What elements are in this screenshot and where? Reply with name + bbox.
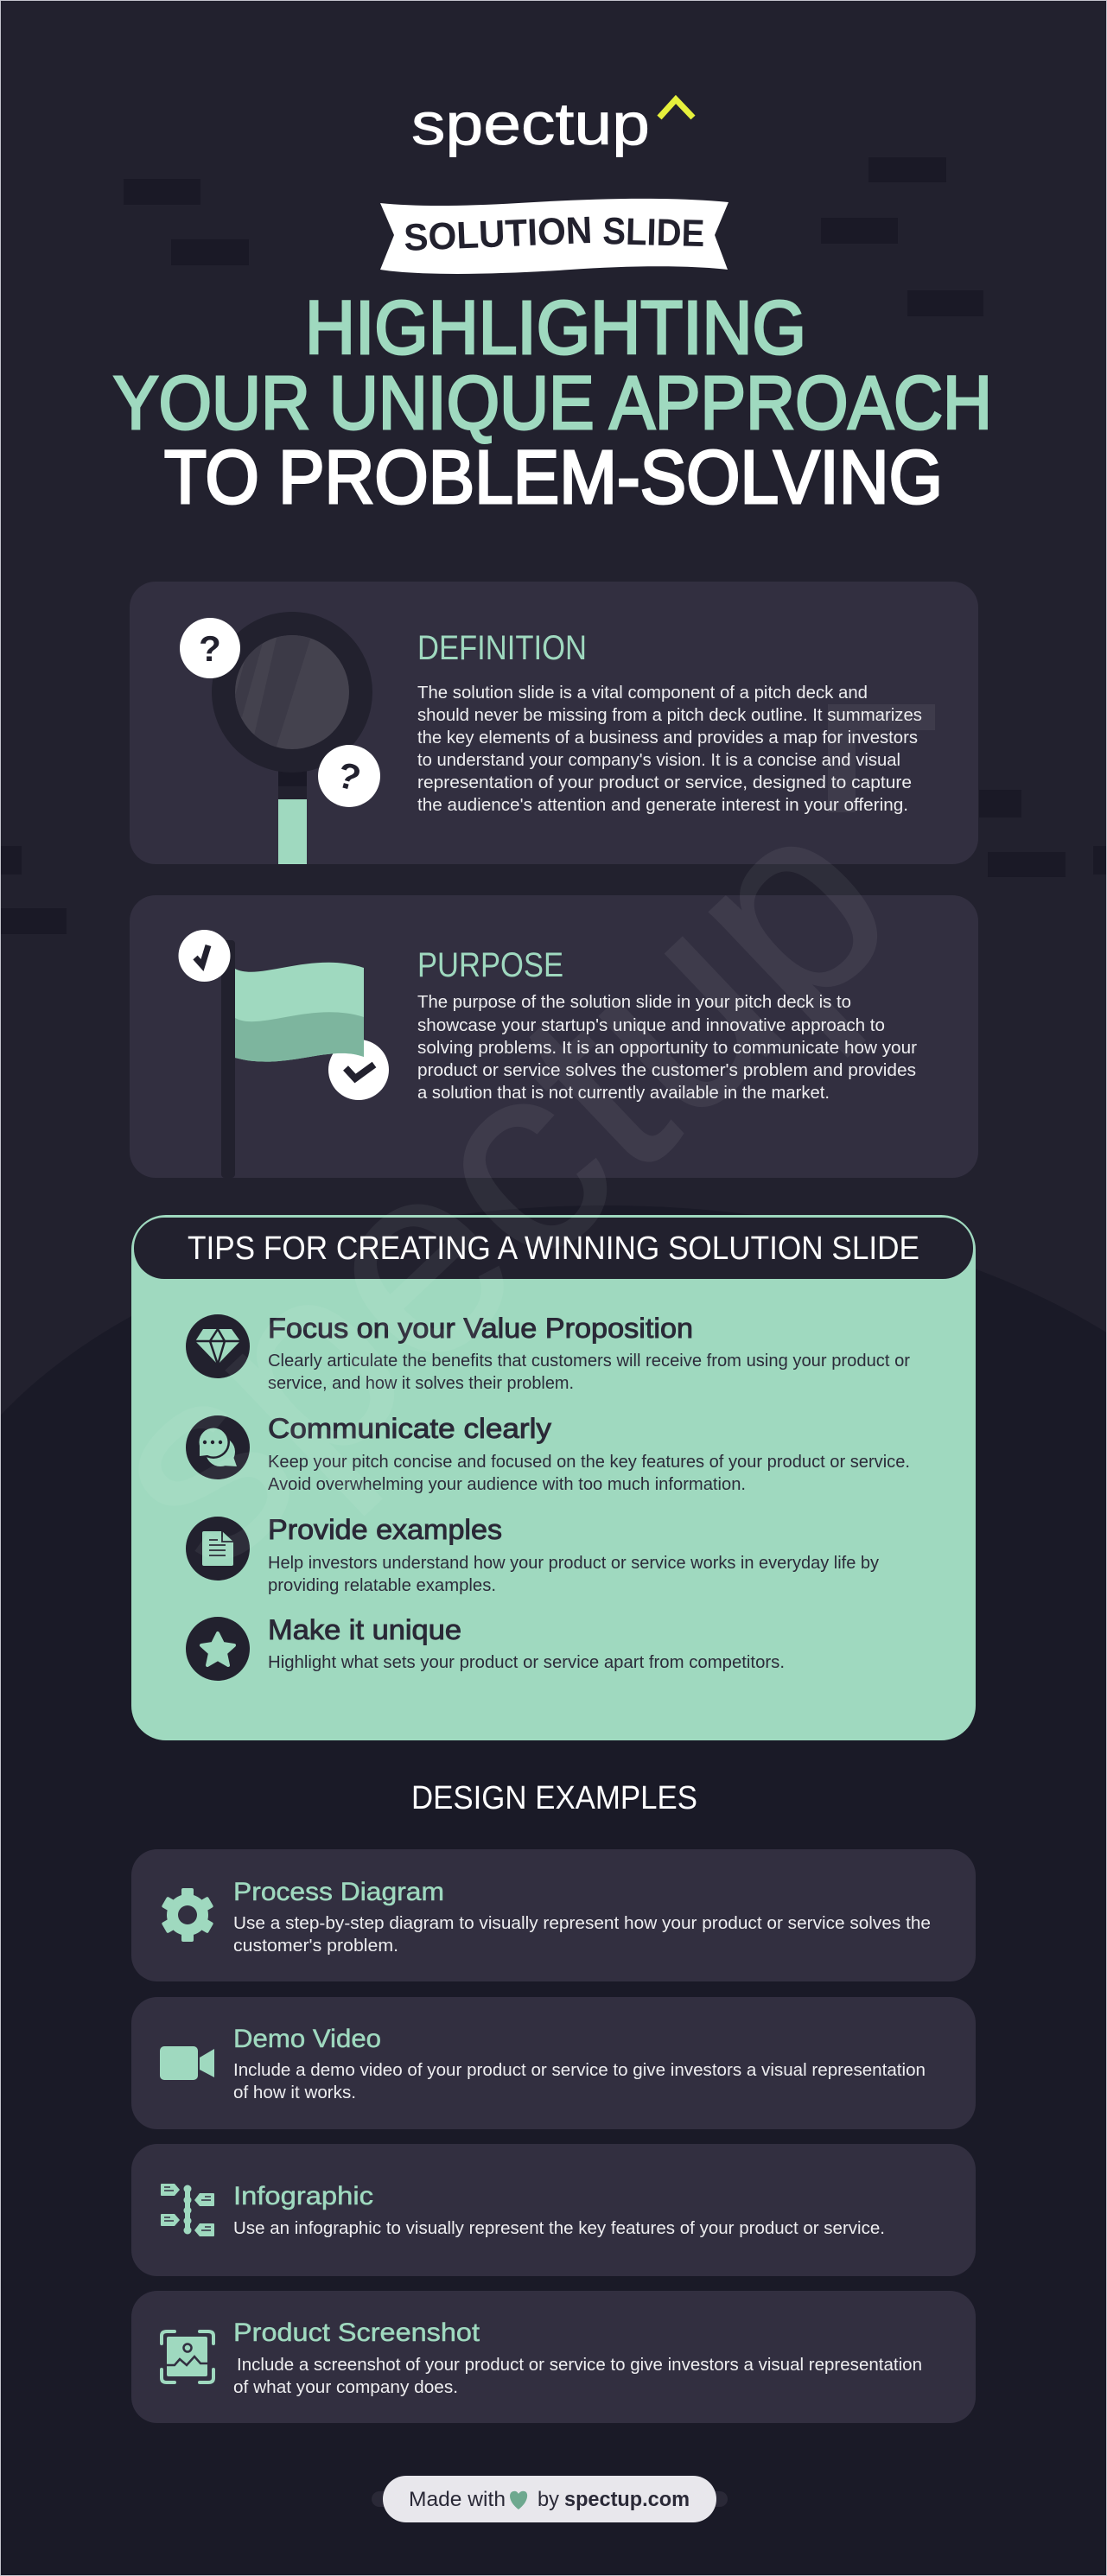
banner: solution slide: SLIDE xyxy=(602,210,705,255)
card: product screenshot xyxy=(131,2291,976,2423)
purpose text: a solution that is not currently available in the market. xyxy=(417,1083,830,1103)
heading: purpose: PURPOSE xyxy=(417,946,563,984)
definition text: should never be missing from a pitch deck outline. It summarizes xyxy=(417,705,922,725)
tip: value proposition: Clearly articulate the benefits that customers will receive from using your product or xyxy=(268,1352,910,1371)
footer badge: spectup.com xyxy=(564,2488,690,2511)
tips heading band: TIPS FOR CREATING A WINNING SOLUTION SLIDE xyxy=(188,1231,919,1267)
card: process diagram xyxy=(131,1849,976,1981)
tip: value proposition: Focus on your Value Proposition xyxy=(268,1313,693,1344)
tip: communicate clearly xyxy=(186,1413,910,1494)
card: process diagram: Use a step-by-step diagram to visually represent how your product or service solves the xyxy=(233,1913,931,1933)
purpose text: product or service solves the customer's problem and provides xyxy=(417,1060,916,1080)
panel: tips xyxy=(131,1215,976,1740)
definition text: the key elements of a business and provides a map for investors xyxy=(417,728,918,747)
card: demo video: Demo Video xyxy=(233,2025,381,2053)
tip: value proposition xyxy=(186,1313,910,1393)
tip: provide examples: Help investors understand how your product or service works in everyday life by xyxy=(268,1554,879,1573)
card: demo video: Include a demo video of your product or service to give investors a visual representation xyxy=(233,2060,926,2080)
definition text xyxy=(417,683,922,815)
purpose text: showcase your startup's unique and innovative approach to xyxy=(417,1015,885,1035)
purpose text: The purpose of the solution slide in your pitch deck is to xyxy=(417,992,851,1012)
tip: communicate clearly: Keep your pitch concise and focused on the key features of your product or service. xyxy=(268,1453,910,1472)
card: product screenshot: Include a screenshot of your product or service to give investors a visual representation xyxy=(237,2355,922,2375)
icon: magnifying glass with question marks xyxy=(180,612,380,864)
icon: flag with check marks xyxy=(178,930,389,1178)
footer badge xyxy=(372,2476,728,2522)
heading: design examples: DESIGN EXAMPLES xyxy=(411,1780,697,1816)
card: process diagram: Process Diagram xyxy=(233,1878,444,1906)
tip: provide examples xyxy=(186,1514,879,1595)
card: infographic: Use an infographic to visually represent the key features of your product or service. xyxy=(233,2218,885,2238)
tip: make it unique: Highlight what sets your product or service apart from competitors. xyxy=(268,1653,785,1672)
definition text: the audience's attention and generate interest in your offering. xyxy=(417,795,908,815)
title: YOUR UNIQUE APPROACH xyxy=(113,361,992,445)
card: product screenshot: of what your company does. xyxy=(233,2377,458,2397)
card: infographic: Infographic xyxy=(233,2182,373,2210)
tip: make it unique xyxy=(186,1614,785,1681)
banner: solution slide xyxy=(380,199,728,274)
panel: definition xyxy=(130,582,978,864)
footer badge: Made with xyxy=(409,2488,506,2511)
card: process diagram: customer's problem. xyxy=(233,1936,398,1956)
title xyxy=(113,286,992,519)
tips heading band xyxy=(134,1218,973,1279)
tip: make it unique: Make it unique xyxy=(268,1614,461,1645)
panel: purpose xyxy=(130,895,978,1178)
tip: provide examples: providing relatable examples. xyxy=(268,1576,496,1595)
tip: communicate clearly: Avoid overwhelming your audience with too much information. xyxy=(268,1475,746,1494)
title: TO PROBLEM-SOLVING xyxy=(164,436,943,519)
tip: provide examples: Provide examples xyxy=(268,1514,502,1545)
purpose text: solving problems. It is an opportunity to communicate how your xyxy=(417,1038,917,1058)
footer badge: by xyxy=(538,2488,559,2511)
icon: infographic xyxy=(161,2184,214,2236)
card: infographic xyxy=(131,2144,976,2276)
icon: video camera xyxy=(160,2046,214,2080)
definition text: The solution slide is a vital component of a pitch deck and xyxy=(417,683,868,703)
icon: screenshot frame xyxy=(162,2331,213,2382)
card: demo video xyxy=(131,1997,976,2129)
tip: communicate clearly: Communicate clearly xyxy=(268,1413,551,1444)
card: demo video: of how it works. xyxy=(233,2083,356,2102)
icon: gear xyxy=(162,1888,213,1942)
card: product screenshot: Product Screenshot xyxy=(233,2318,480,2347)
banner: solution slide: SOLUTION xyxy=(403,209,593,259)
definition text: representation of your product or service, designed to capture xyxy=(417,773,912,792)
icon: magnifying glass with question marks: ? xyxy=(333,754,365,799)
heading: definition: DEFINITION xyxy=(417,629,587,667)
watermark: spectup: spectup xyxy=(44,746,946,1624)
definition text: to understand your company's vision. It is a concise and visual xyxy=(417,750,900,770)
logo: spectup: spectup xyxy=(411,91,650,157)
purpose text xyxy=(417,992,917,1103)
title: HIGHLIGHTING xyxy=(305,286,806,370)
tip: value proposition: service, and how it solves their problem. xyxy=(268,1374,574,1393)
icon: magnifying glass with question marks: ? xyxy=(199,628,221,669)
